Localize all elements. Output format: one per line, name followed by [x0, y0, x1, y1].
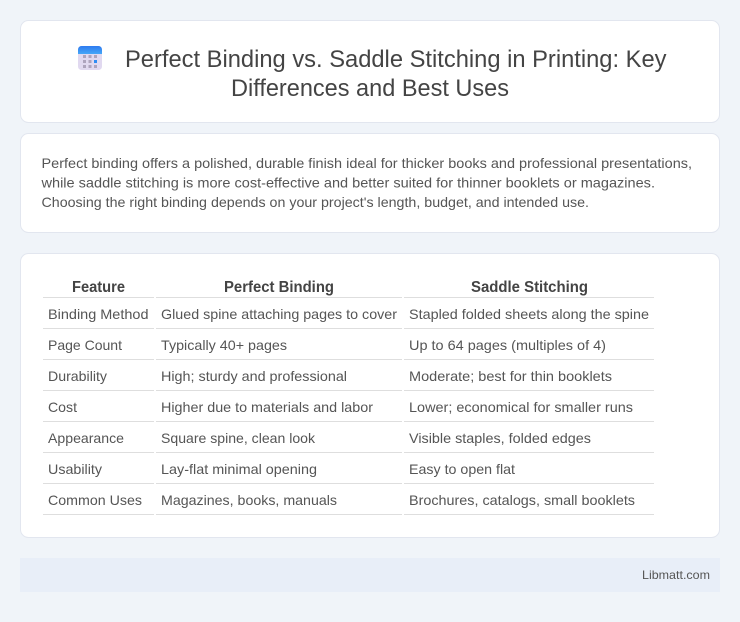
row: appearance: Visible staples, folded edges [409, 430, 591, 446]
table header: Perfect Binding [224, 279, 334, 296]
row: usability: Usability [48, 461, 102, 477]
footer [20, 558, 720, 592]
panel: comparison table [20, 254, 720, 538]
row: durability [48, 368, 612, 384]
row: durability: Durability [48, 368, 107, 384]
icon: calendar [78, 46, 102, 70]
row: binding method: Glued spine attaching pages to cover [161, 306, 397, 322]
row: common uses: Common Uses [48, 492, 142, 508]
row: page count: Up to 64 pages (multiples of 4) [409, 337, 606, 353]
row: binding method: Binding Method [48, 306, 148, 322]
row: durability: High; sturdy and professional [161, 368, 347, 384]
row: page count [48, 337, 606, 353]
summary line 3: Choosing the right binding depends on your project's length, budget, and intended use. [42, 194, 589, 210]
panel: title [20, 20, 720, 122]
row: usability: Lay-flat minimal opening [161, 461, 317, 477]
table header [72, 279, 588, 296]
row: binding method [48, 306, 649, 322]
summary line 2: while saddle stitching is more cost-effective and better suited for thinner booklets or magazines. [40, 174, 655, 190]
row: appearance: Square spine, clean look [161, 430, 316, 446]
heading line 1: Perfect Binding vs. Saddle Stitching in Printing: Key [125, 46, 666, 73]
row: page count: Typically 40+ pages [161, 337, 287, 353]
row: appearance: Appearance [48, 430, 124, 446]
table header: Saddle Stitching [471, 279, 588, 296]
footer credit: Libmatt.com [642, 568, 710, 582]
summary line 1: Perfect binding offers a polished, durable finish ideal for thicker books and professional presentations, [42, 155, 692, 171]
row: common uses: Brochures, catalogs, small booklets [409, 492, 635, 508]
row: durability: Moderate; best for thin booklets [409, 368, 612, 384]
row: common uses [48, 492, 635, 508]
row: common uses: Magazines, books, manuals [161, 492, 337, 508]
row: usability [48, 461, 515, 477]
panel: summary [20, 134, 720, 232]
row: cost: Cost [48, 399, 77, 415]
row: page count: Page Count [48, 337, 122, 353]
row: binding method: Stapled folded sheets along the spine [409, 306, 649, 322]
row: cost [48, 399, 633, 415]
heading line 2: Differences and Best Uses [231, 75, 509, 102]
row: cost: Lower; economical for smaller runs [409, 399, 633, 415]
table header: Feature [72, 279, 125, 296]
row: appearance [48, 430, 591, 446]
row: usability: Easy to open flat [409, 461, 515, 477]
row: cost: Higher due to materials and labor [161, 399, 373, 415]
